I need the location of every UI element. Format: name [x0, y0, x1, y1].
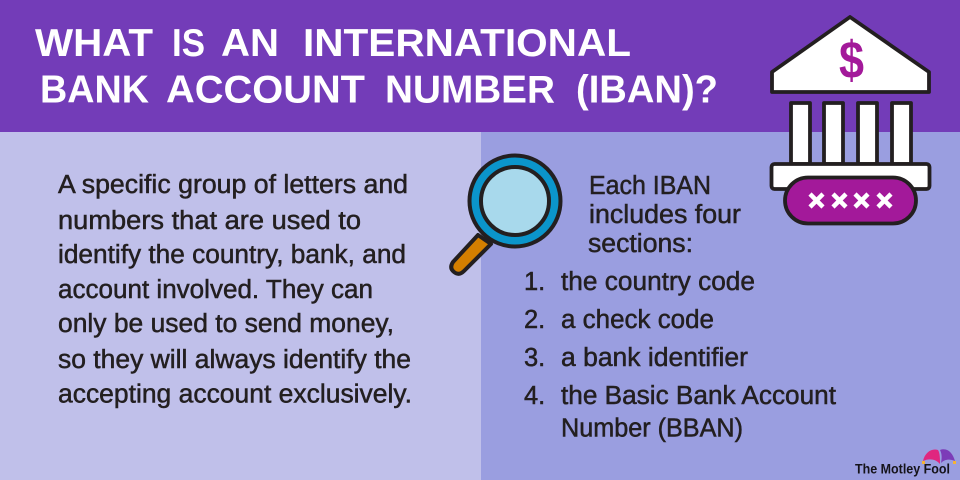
title: BANK — [40, 68, 149, 112]
magnifier handle — [451, 235, 491, 274]
magnifier ring — [470, 156, 560, 246]
title: ACCOUNT — [166, 68, 365, 112]
masked number pill — [785, 178, 916, 224]
sections intro: sections: — [588, 230, 693, 258]
sections intro: includes four — [589, 201, 742, 229]
numbered list: a check code — [561, 306, 714, 334]
title: NUMBER — [385, 68, 555, 112]
numbered list: the country code — [561, 268, 755, 296]
left description text: accepting account exclusively. — [58, 380, 412, 408]
numbered list: 3. — [524, 344, 545, 372]
left description text: account involved. They can — [58, 276, 373, 304]
icon: bank building — [772, 17, 930, 224]
left description text: so they will always identify the — [58, 346, 411, 374]
numbered list: a bank identifier — [561, 344, 749, 372]
bank columns — [791, 103, 911, 164]
numbered list: 2. — [524, 306, 545, 334]
magnifier lens — [481, 167, 549, 235]
sections intro: Each IBAN — [589, 172, 711, 200]
title — [35, 22, 718, 112]
numbered list — [524, 268, 836, 442]
bank roof — [772, 17, 929, 92]
left description text: only be used to send money, — [58, 310, 394, 338]
icon: magnifying glass — [451, 156, 560, 274]
numbered list: 4. — [524, 382, 545, 410]
wordmark: The Motley Fool — [855, 460, 950, 476]
title: WHAT — [35, 22, 154, 65]
right panel background — [481, 132, 960, 480]
dollar sign: $ — [839, 31, 864, 90]
numbered list: the Basic Bank Account — [561, 382, 836, 410]
title: INTERNATIONAL — [303, 22, 631, 65]
left description text — [58, 171, 412, 408]
jester hat — [922, 449, 956, 464]
title: AN — [221, 22, 279, 65]
bank base — [772, 164, 930, 189]
title: (IBAN)? — [576, 68, 718, 112]
numbered list: Number (BBAN) — [561, 414, 743, 442]
header band — [0, 0, 960, 132]
left description text: identify the country, bank, and — [58, 241, 406, 269]
sections intro — [588, 172, 742, 258]
title: IS — [172, 22, 205, 65]
left panel background — [0, 132, 481, 480]
numbered list: 1. — [524, 268, 545, 296]
left description text: A specific group of letters and — [58, 171, 408, 199]
left description text: numbers that are used to — [58, 207, 361, 235]
logo: The Motley Fool — [855, 449, 956, 476]
